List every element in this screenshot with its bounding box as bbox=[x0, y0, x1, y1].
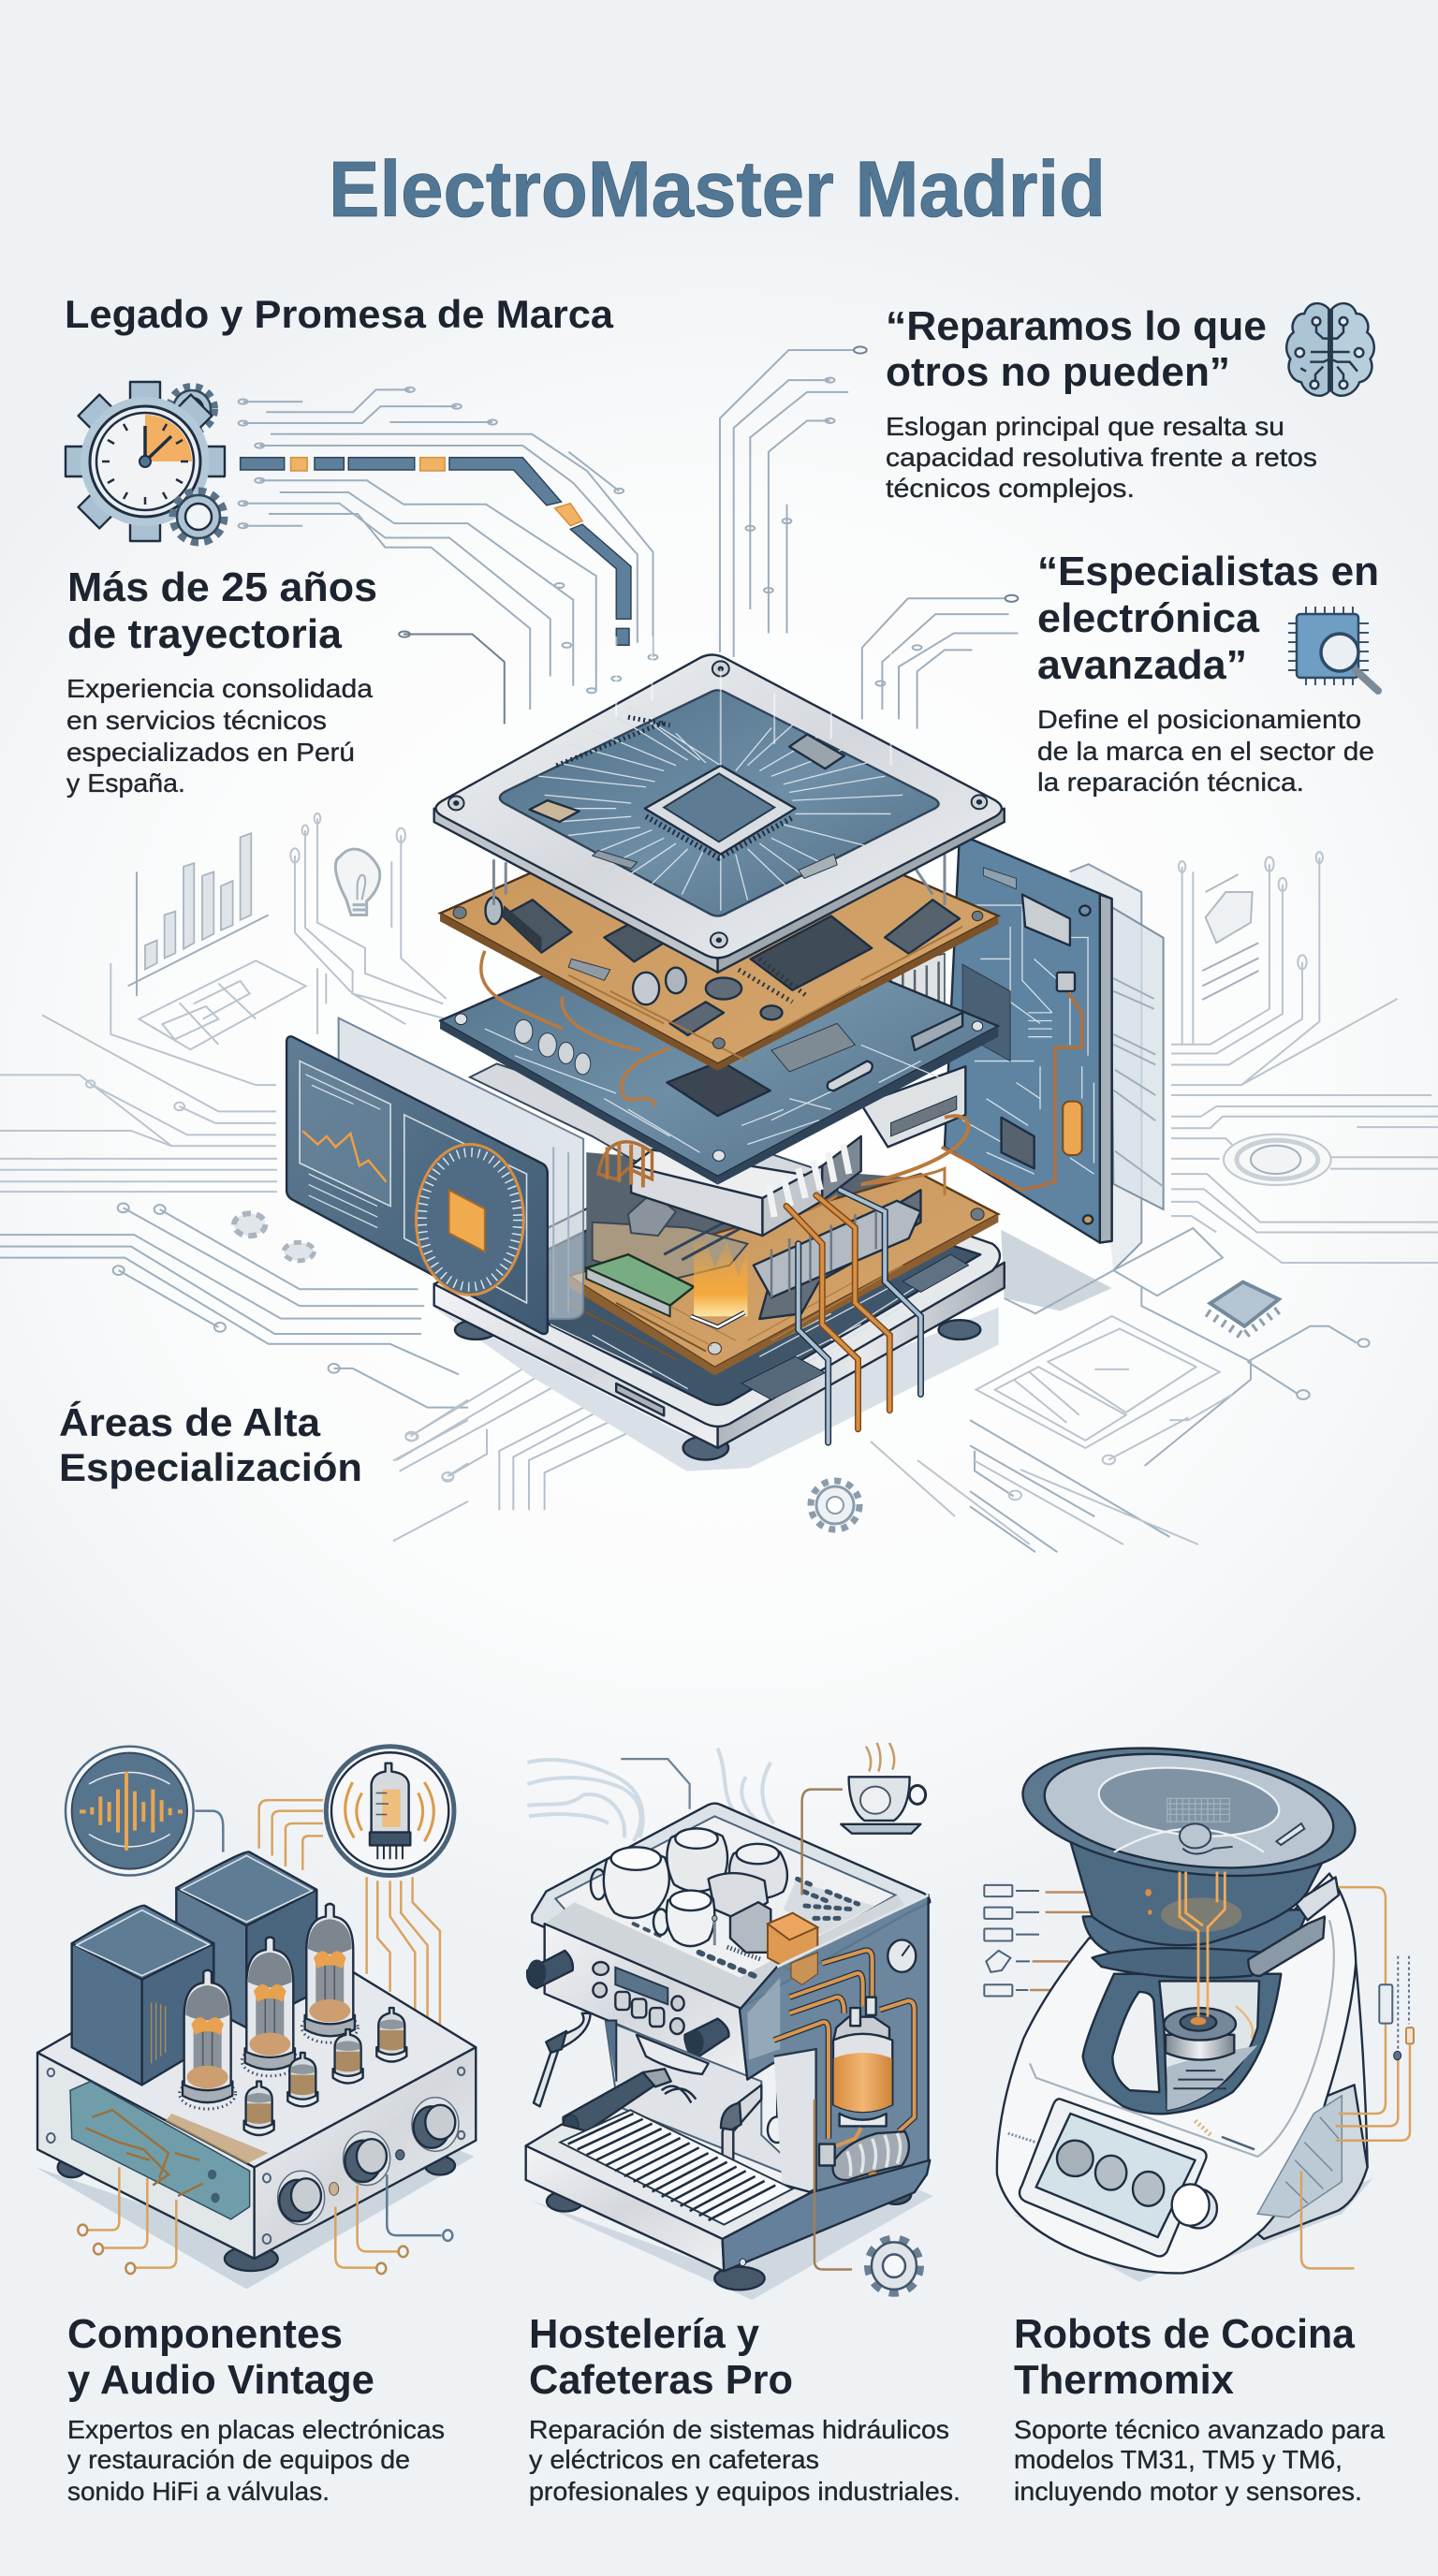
illustration: Thermomix kitchen robot bbox=[984, 1732, 1414, 2282]
text: posicionamiento: la reparación técnica. bbox=[1037, 768, 1304, 797]
text: experiencia bbox=[66, 674, 373, 798]
background schematic: left bbox=[0, 813, 468, 1541]
heading: mas de 25 anos bbox=[67, 564, 377, 657]
front panel bbox=[527, 1924, 747, 2080]
icon: chip with magnifier bbox=[1288, 607, 1378, 691]
column 3 text bbox=[1014, 2415, 1385, 2506]
column 2 heading: Hostelería y bbox=[529, 2311, 760, 2357]
icon: gear bbox=[814, 2100, 920, 2293]
heading: areas de alta especializacion: Especialización bbox=[59, 1445, 362, 1489]
small lower gear bbox=[173, 491, 224, 542]
right circuit panel bbox=[942, 834, 1112, 1243]
column 3 text: incluyendo motor y sensores. bbox=[1014, 2477, 1362, 2506]
lower copper board bbox=[568, 1174, 998, 1375]
control panel bbox=[1008, 2099, 1255, 2256]
column 1 heading: y Audio Vintage bbox=[67, 2357, 374, 2403]
top silver frame with processor board bbox=[434, 637, 1005, 973]
middle blue board bbox=[440, 905, 998, 1185]
background schematic: right bbox=[970, 852, 1438, 1552]
column 3 text: modelos TM31, TM5 y TM6, bbox=[1014, 2445, 1343, 2474]
orange blade glow bbox=[1145, 1872, 1225, 2017]
icon: sound wave circle bbox=[66, 1747, 223, 1876]
heading: areas de alta especializacion: Áreas de Alta bbox=[59, 1400, 321, 1444]
background schematic: bottom traces and gear bbox=[396, 1360, 1198, 1544]
cups bbox=[591, 1828, 787, 1946]
quote: reparamos bbox=[886, 303, 1267, 395]
column 1 heading: Componentes bbox=[67, 2311, 343, 2357]
collar and clip bbox=[1083, 1877, 1339, 1978]
side labels bbox=[984, 1885, 1145, 1996]
text: eslogan: técnicos complejos. bbox=[886, 474, 1135, 503]
illustration: espresso machine bbox=[526, 1743, 933, 2300]
icon: coffee cup bbox=[802, 1743, 926, 1895]
transformers bbox=[72, 1852, 316, 2085]
text: eslogan bbox=[886, 412, 1317, 503]
text: eslogan: Eslogan principal que resalta su bbox=[886, 412, 1284, 441]
text: experiencia: y España. bbox=[66, 768, 185, 798]
heading: legado y promesa: Legado y Promesa de Marca bbox=[65, 292, 614, 336]
pump bbox=[774, 2128, 909, 2227]
illustration: vintage audio amplifier bbox=[36, 1747, 476, 2290]
copper circuit board bbox=[440, 792, 998, 1071]
heading: mas de 25 anos: de trayectoria bbox=[67, 611, 343, 657]
column 1 text: Expertos en placas electrónicas bbox=[67, 2415, 445, 2444]
connection leads bbox=[78, 2167, 452, 2274]
bowl bbox=[1070, 1841, 1329, 1945]
text: posicionamiento: de la marca en el sector de bbox=[1037, 737, 1374, 766]
circuit traces: top left bbox=[239, 388, 657, 724]
drip tray bbox=[526, 2110, 930, 2271]
column 2 text: Reparación de sistemas hidráulicos bbox=[529, 2415, 949, 2444]
text: experiencia: Experiencia consolidada bbox=[66, 674, 373, 703]
text: posicionamiento: Define el posicionamiento bbox=[1037, 705, 1361, 734]
quote: especialistas: “Especialistas en bbox=[1037, 549, 1379, 594]
title: ElectroMaster Madrid bbox=[329, 145, 1106, 233]
quote: reparamos: “Reparamos lo que bbox=[886, 303, 1267, 349]
small upper gear bbox=[169, 387, 214, 432]
central exploded electronics device bbox=[286, 637, 1112, 1471]
grinder and orange block bbox=[727, 1902, 817, 1970]
right side glass panel with piping bbox=[740, 1895, 929, 2205]
column 1 heading bbox=[67, 2311, 374, 2403]
left display panel with waveform bbox=[286, 1018, 583, 1334]
robot body bbox=[997, 1874, 1356, 2273]
column 3 heading: Thermomix bbox=[1014, 2357, 1235, 2403]
steam bbox=[527, 1749, 774, 1841]
machine upper frame and deck bbox=[532, 1804, 930, 2008]
amp chassis bbox=[37, 1920, 476, 2271]
vacuum tubes bbox=[180, 1904, 406, 2135]
icon: gear clock bbox=[66, 382, 225, 542]
lid bbox=[1018, 1732, 1360, 1893]
quote: reparamos: otros no pueden” bbox=[886, 349, 1230, 395]
quote: especialistas: avanzada” bbox=[1037, 642, 1247, 688]
column 1 text bbox=[67, 2415, 445, 2506]
icon: vacuum tube circle bbox=[326, 1747, 454, 1876]
column 1 text: sonido HiFi a válvulas. bbox=[67, 2477, 330, 2506]
device shadow bbox=[433, 1308, 999, 1471]
orange signal traces bbox=[259, 1800, 440, 2053]
heading: areas de alta especializacion bbox=[59, 1400, 362, 1489]
text: experiencia: especializados en Perú bbox=[66, 738, 355, 767]
column 2 heading bbox=[529, 2311, 793, 2403]
silver module and heat sink bbox=[470, 1063, 968, 1236]
text: posicionamiento bbox=[1037, 705, 1374, 797]
column 3 heading: Robots de Cocina bbox=[1014, 2311, 1356, 2357]
column 3 text: Soporte técnico avanzado para bbox=[1014, 2415, 1385, 2444]
column 2 text: y eléctricos en cafeteras bbox=[529, 2445, 819, 2474]
column 2 heading: Cafeteras Pro bbox=[529, 2357, 793, 2403]
quote: especialistas: electrónica bbox=[1037, 595, 1260, 641]
column 3 heading bbox=[1014, 2311, 1356, 2403]
circuit traces: top centre and right bbox=[720, 346, 1018, 729]
column 2 text: profesionales y equipos industriales. bbox=[529, 2477, 961, 2506]
robot base rear glass bbox=[1252, 2085, 1368, 2239]
base tray bbox=[434, 1147, 1005, 1460]
hanging cables bbox=[786, 1190, 920, 1442]
knobs bbox=[278, 2098, 459, 2225]
mixing jug bbox=[1083, 1974, 1281, 2114]
machine feet bbox=[547, 2184, 911, 2290]
heading: mas de 25 anos: Más de 25 años bbox=[67, 564, 377, 610]
quote: especialistas bbox=[1037, 549, 1379, 688]
text: eslogan: capacidad resolutiva frente a retos bbox=[886, 443, 1317, 472]
column 2 text bbox=[529, 2415, 961, 2506]
icon: brain bbox=[1286, 303, 1374, 396]
column 1 text: y restauración de equipos de bbox=[67, 2445, 410, 2474]
orange traces right bbox=[1301, 1887, 1410, 2268]
machine interior fill bbox=[586, 1152, 932, 1313]
central column and side window bbox=[534, 2013, 814, 2186]
text: experiencia: en servicios técnicos bbox=[66, 706, 327, 735]
